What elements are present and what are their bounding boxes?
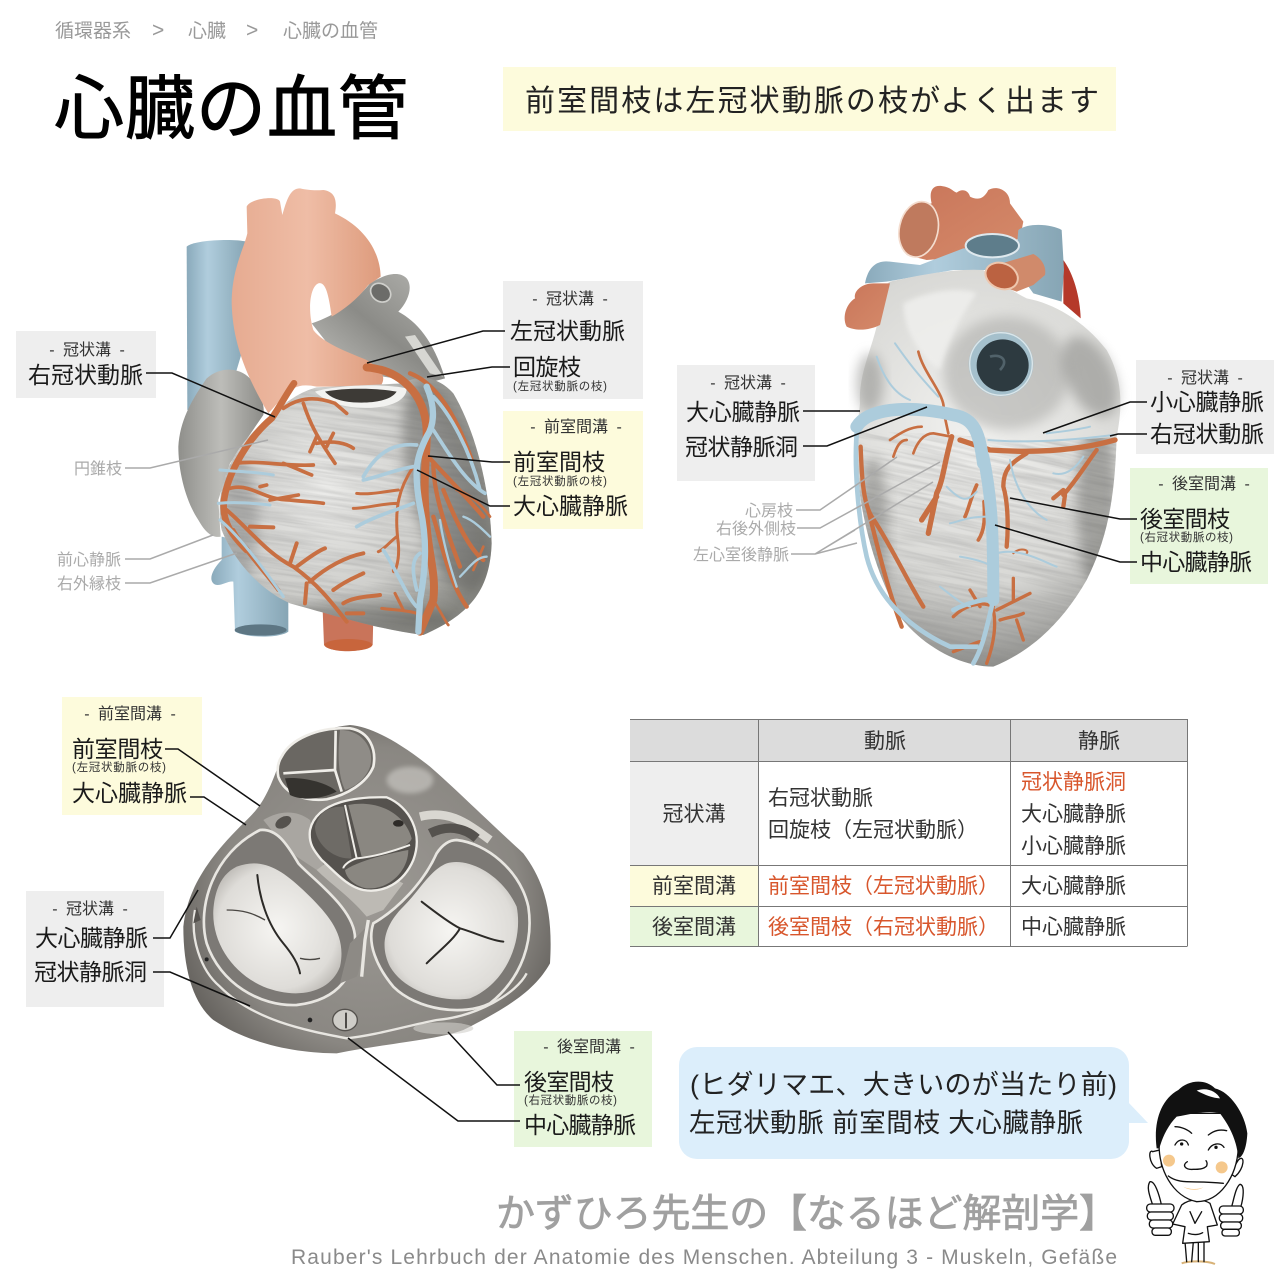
panel: label anterior interventricular: - 前室間溝 -: [530, 418, 622, 436]
panel: label anterior interventricular: 前室間枝: [513, 449, 605, 475]
table: vessels by groove: [630, 719, 1188, 946]
table: vessels by groove: 大心臓静脈: [1021, 803, 1126, 826]
callout: subtitle: [503, 67, 1116, 131]
table: vessels by groove: 静脈: [1078, 730, 1120, 753]
panel: label left coronary and circumflex: - 冠状溝 -: [532, 290, 608, 308]
panel: label base posterior interventricular: (右冠状動脈の枝): [524, 1093, 617, 1107]
label: left ventricular posterior vein: 左心室後静脈: [693, 546, 789, 564]
vessels: left veins: [357, 387, 490, 632]
leader lines: posterior heart: [791, 402, 1147, 562]
panel: label posterior interventricular: [1130, 468, 1268, 584]
label: right posterolateral branch: 右後外側枝: [716, 520, 796, 538]
panel: label base anterior interventricular: - 前室間溝 -: [84, 705, 176, 723]
breadcrumb: 循環器系: [55, 20, 131, 42]
breadcrumb: >: [152, 19, 164, 42]
panel: label base posterior interventricular: [514, 1031, 652, 1147]
table: vessels by groove: 大心臓静脈: [1021, 875, 1126, 898]
label: anterior cardiac vein: 前心静脈: [57, 551, 121, 569]
table: vessels by groove: 右冠状動脈: [768, 787, 873, 810]
breadcrumb: >: [246, 19, 258, 42]
table: vessels by groove: 冠状溝: [662, 803, 726, 826]
panel: label left coronary and circumflex: (左冠状動脈の枝): [513, 379, 607, 393]
panel: label base posterior interventricular: 中心臓静脈: [524, 1112, 636, 1138]
panel: label small cardiac vein and right coronary: - 冠状溝 -: [1167, 369, 1243, 387]
leader lines: anterior heart: [125, 331, 510, 583]
panel: label great cardiac vein and coronary sinus: 冠状静脈洞: [685, 434, 798, 460]
table: vessels by groove: 前室間枝（左冠状動脈）: [768, 875, 999, 898]
table: vessels by groove: 前室間溝: [652, 875, 736, 898]
panel: label great cardiac vein and coronary sinus: - 冠状溝 -: [710, 374, 786, 392]
panel: label right coronary artery: - 冠状溝 -: [49, 341, 125, 359]
label: atrial branch: 心房枝: [745, 502, 793, 520]
panel: label base coronary groove: 冠状静脈洞: [34, 959, 147, 985]
panel: label left coronary and circumflex: [503, 281, 643, 399]
illustration: anterior heart: [178, 188, 492, 652]
leader lines: base section: [153, 749, 520, 1121]
panel: label base anterior interventricular: 大心臓静脈: [72, 780, 187, 806]
panel: label small cardiac vein and right coronary: 小心臓静脈: [1150, 389, 1264, 415]
panel: label anterior interventricular: [503, 411, 643, 529]
panel: label right coronary artery: 右冠状動脈: [28, 362, 143, 388]
label: conal branch: 円錐枝: [74, 460, 122, 478]
illustration: heart base cross-section: [183, 725, 551, 1053]
footer: brand: かずひろ先生の【なるほど解剖学】: [496, 1193, 1118, 1236]
panel: label great cardiac vein and coronary sinus: [677, 365, 815, 481]
panel: label base coronary groove: - 冠状溝 -: [52, 900, 128, 918]
vessels: posterior veins: [856, 343, 1113, 663]
breadcrumb: 心臓の血管: [283, 20, 378, 42]
panel: label posterior interventricular: 中心臓静脈: [1140, 549, 1252, 575]
speech bubble: [679, 1047, 1148, 1159]
panel: label posterior interventricular: 後室間枝: [1140, 506, 1230, 532]
speech bubble: (ヒダリマエ、大きいのが当たり前): [690, 1070, 1117, 1100]
table: vessels by groove: 動脈: [864, 730, 906, 753]
label: right marginal branch: 右外縁枝: [57, 575, 121, 593]
panel: label base anterior interventricular: (左冠状動脈の枝): [72, 760, 166, 774]
table: vessels by groove: 小心臓静脈: [1021, 835, 1126, 858]
panel: label small cardiac vein and right coronary: [1136, 360, 1274, 454]
table: vessels by groove: 後室間枝（右冠状動脈）: [768, 916, 999, 939]
illustration: posterior heart: [844, 186, 1124, 667]
panel: label base coronary groove: [26, 891, 164, 1007]
panel: label anterior interventricular: (左冠状動脈の枝): [513, 474, 607, 488]
breadcrumb: 心臓: [188, 20, 226, 42]
panel: label great cardiac vein and coronary sinus: 大心臓静脈: [686, 399, 800, 425]
panel: label small cardiac vein and right coronary: 右冠状動脈: [1150, 421, 1264, 447]
panel: label posterior interventricular: (右冠状動脈の枝): [1140, 530, 1233, 544]
callout: subtitle: 前室間枝は左冠状動脈の枝がよく出ます: [525, 85, 1099, 118]
panel: label right coronary artery: [16, 331, 156, 398]
panel: label posterior interventricular: - 後室間溝 -: [1158, 475, 1250, 493]
speech bubble: 左冠状動脈 前室間枝 大心臓静脈: [689, 1108, 1083, 1138]
vessels: left coronary artery branches: [353, 367, 490, 632]
panel: label base posterior interventricular: - 後室間溝 -: [543, 1038, 635, 1056]
panel: label anterior interventricular: 大心臓静脈: [513, 493, 628, 519]
table: vessels by groove: 回旋枝（左冠状動脈）: [768, 819, 978, 842]
breadcrumb: [55, 19, 378, 42]
panel: label base coronary groove: 大心臓静脈: [35, 925, 148, 951]
vessels: posterior arteries: [861, 352, 1115, 663]
icon: doctor character: [1147, 1082, 1247, 1264]
panel: label left coronary and circumflex: 左冠状動脈: [510, 318, 625, 344]
table: vessels by groove: 冠状静脈洞: [1021, 771, 1126, 794]
table: vessels by groove: 後室間溝: [652, 916, 736, 939]
table: vessels by groove: 中心臓静脈: [1021, 916, 1126, 939]
title: 心臓の血管: [54, 70, 408, 148]
panel: label base posterior interventricular: 後室間枝: [524, 1069, 614, 1095]
panel: label base anterior interventricular: 前室間枝: [72, 736, 163, 762]
panel: label left coronary and circumflex: 回旋枝: [513, 354, 581, 380]
vessels: right coronary artery branches: [218, 383, 380, 622]
panel: label base anterior interventricular: [62, 697, 202, 815]
footer: source: Rauber's Lehrbuch der Anatomie des Menschen. Abteilung 3 - Muskeln, Gefäße: [291, 1246, 1117, 1269]
